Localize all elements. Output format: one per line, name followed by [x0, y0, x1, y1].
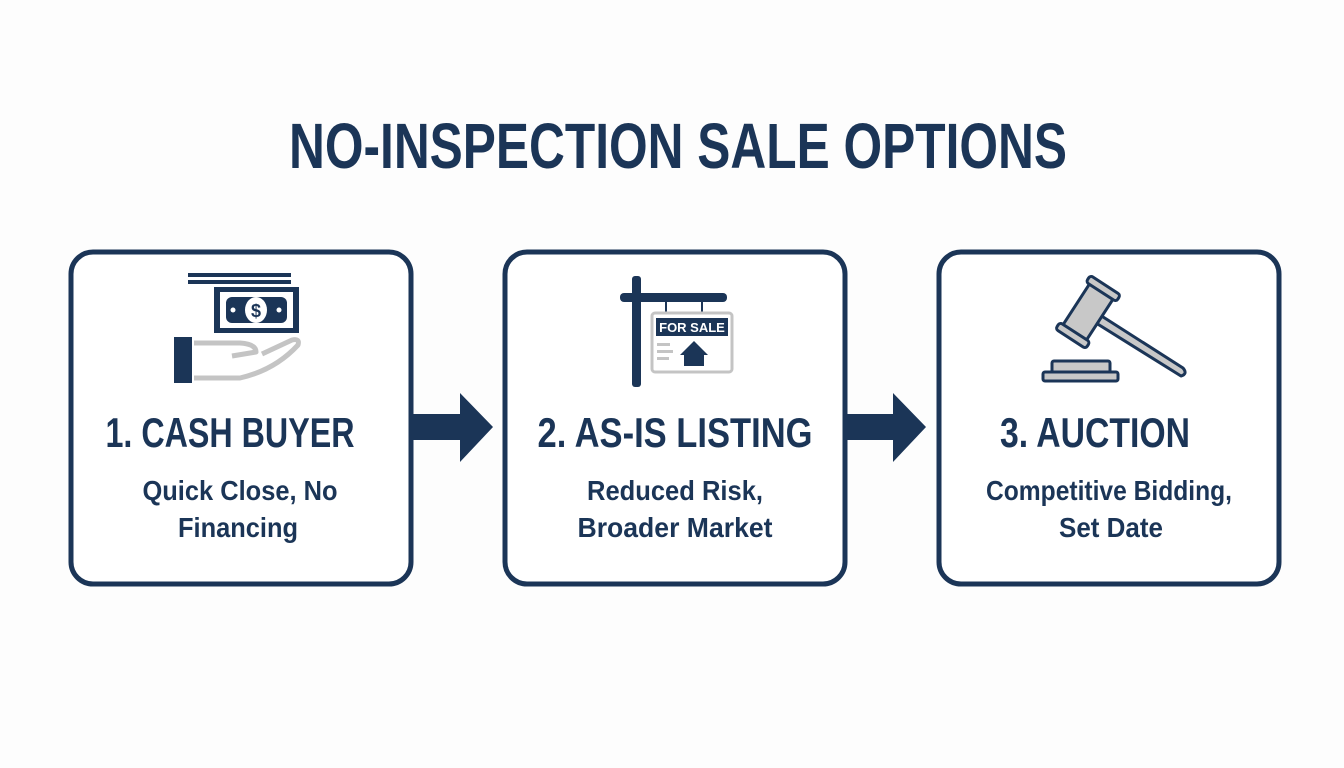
- icon: gavel: [1043, 275, 1185, 381]
- panel: as-is listing: [505, 252, 845, 584]
- arrow 2: [847, 393, 926, 462]
- heading: 3. AUCTION: [1000, 409, 1190, 456]
- heading: 1. CASH BUYER: [106, 409, 354, 456]
- text block: [578, 475, 772, 543]
- text block: Broader Market: [578, 512, 772, 543]
- icon: cash in hand: $: [251, 301, 261, 321]
- text block: [142, 475, 338, 543]
- text block: Competitive Bidding,: [986, 475, 1232, 506]
- icon: for sale sign: FOR SALE: [659, 320, 725, 335]
- text block: Set Date: [1059, 512, 1163, 543]
- text block: [986, 475, 1232, 543]
- title: NO-INSPECTION SALE OPTIONS: [289, 110, 1067, 182]
- text block: Quick Close, No: [142, 475, 338, 506]
- arrow 1: [413, 393, 493, 462]
- heading: 2. AS-IS LISTING: [538, 409, 812, 456]
- icon: cash in hand: [174, 273, 299, 383]
- panel: auction: [939, 252, 1279, 584]
- panel: cash buyer: [71, 252, 411, 584]
- icon: for sale sign: [620, 276, 732, 387]
- text block: Reduced Risk,: [587, 475, 763, 506]
- text block: Financing: [178, 512, 298, 543]
